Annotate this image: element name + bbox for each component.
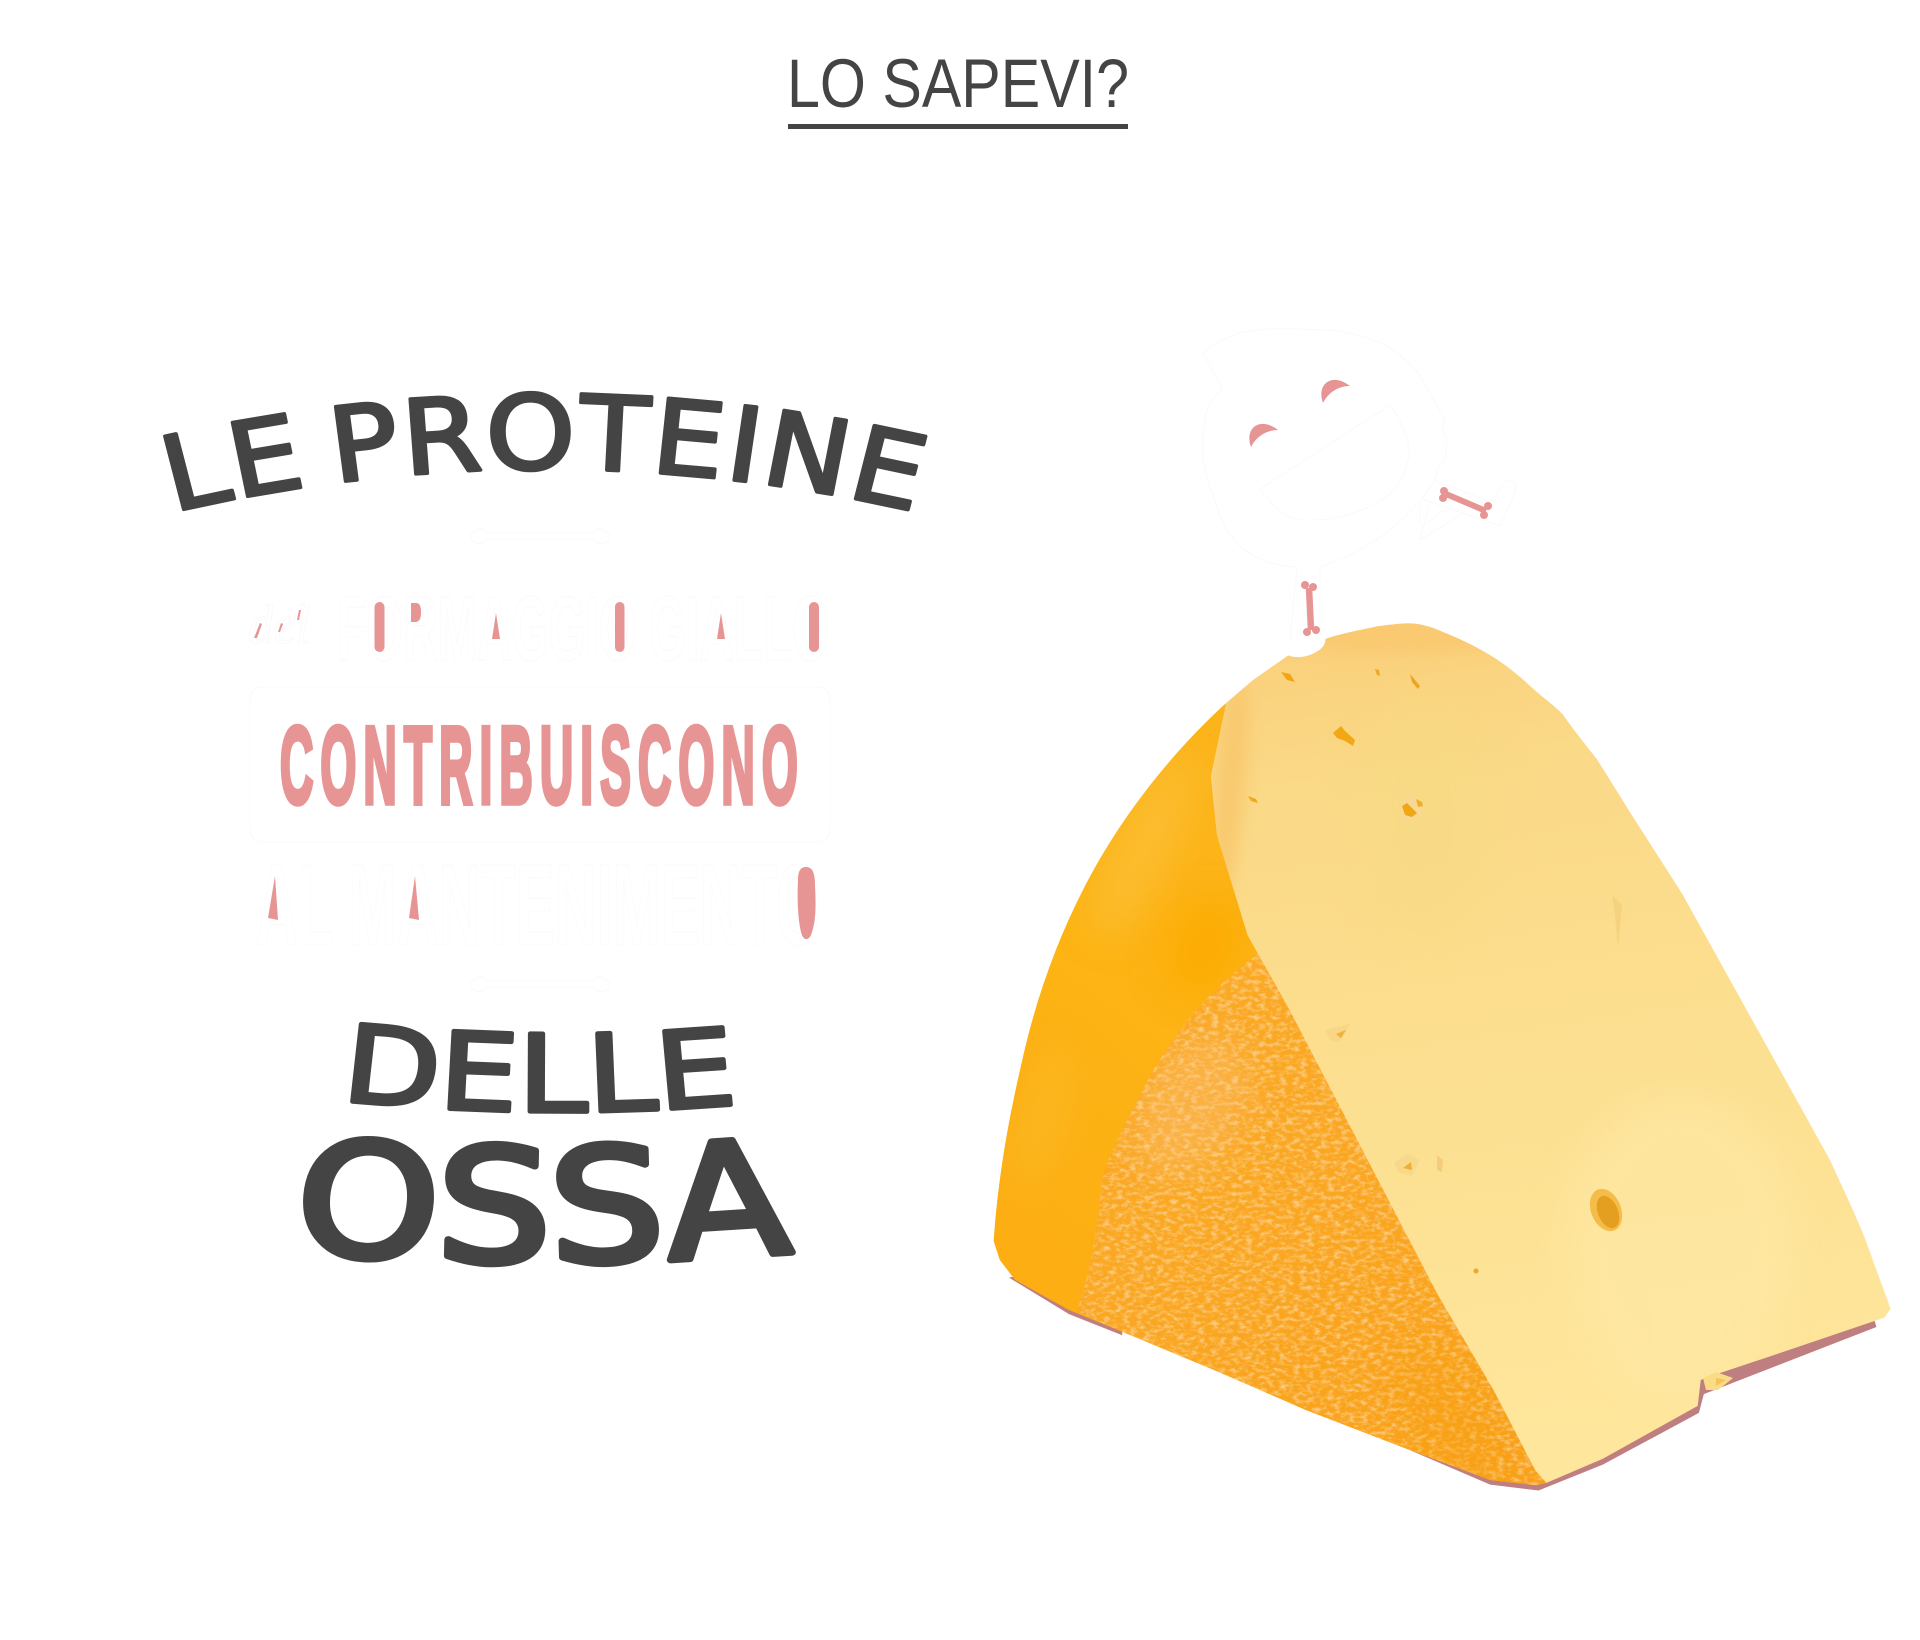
character mouth (1260, 405, 1409, 520)
rind (994, 656, 1546, 1485)
white line: AL MANTENIMENTO (256, 840, 821, 970)
white line: AL MANTENIMENTO: AL MANTENIMENTO (256, 840, 821, 970)
heading text block (163, 390, 928, 1268)
white line: del FORMAGGIO GIALLO (248, 578, 829, 680)
cut face of the cheese (1204, 618, 1891, 1483)
character body (1203, 329, 1485, 640)
infographic canvas (163, 58, 1890, 1490)
white line: del FORMAGGIO GIALLO: del (248, 594, 310, 656)
cheese shadow (1009, 1276, 1876, 1491)
title: LO SAPEVI?: LO SAPEVI? (787, 45, 1129, 122)
right eye (1321, 380, 1350, 403)
leg bone (1301, 581, 1320, 636)
textured orange side (1070, 947, 1554, 1509)
white line: del FORMAGGIO GIALLO: FORMAGGIO GIALLO (337, 578, 829, 680)
left eye (1249, 424, 1278, 447)
heading: OSSA (303, 1136, 796, 1268)
illustration: laughing character (1203, 329, 1516, 662)
character foot (1282, 628, 1328, 662)
curved heading: LE PROTEINE: LE PROTEINE (163, 390, 928, 512)
illustration: wedge of yellow cheese (994, 618, 1891, 1509)
callout box: CONTRIBUISCONO: CONTRIBUISCONO (280, 704, 805, 826)
heading: DELLE (350, 1022, 733, 1114)
character arm (1422, 480, 1516, 526)
decorative bone, upper (471, 529, 610, 544)
heading: DELLE: DELLE (350, 1022, 733, 1114)
decorative bone, lower (471, 977, 610, 992)
arm bone (1439, 487, 1492, 519)
heading: OSSA: OSSA (303, 1136, 796, 1268)
cheese holes and marks (1248, 669, 1733, 1390)
